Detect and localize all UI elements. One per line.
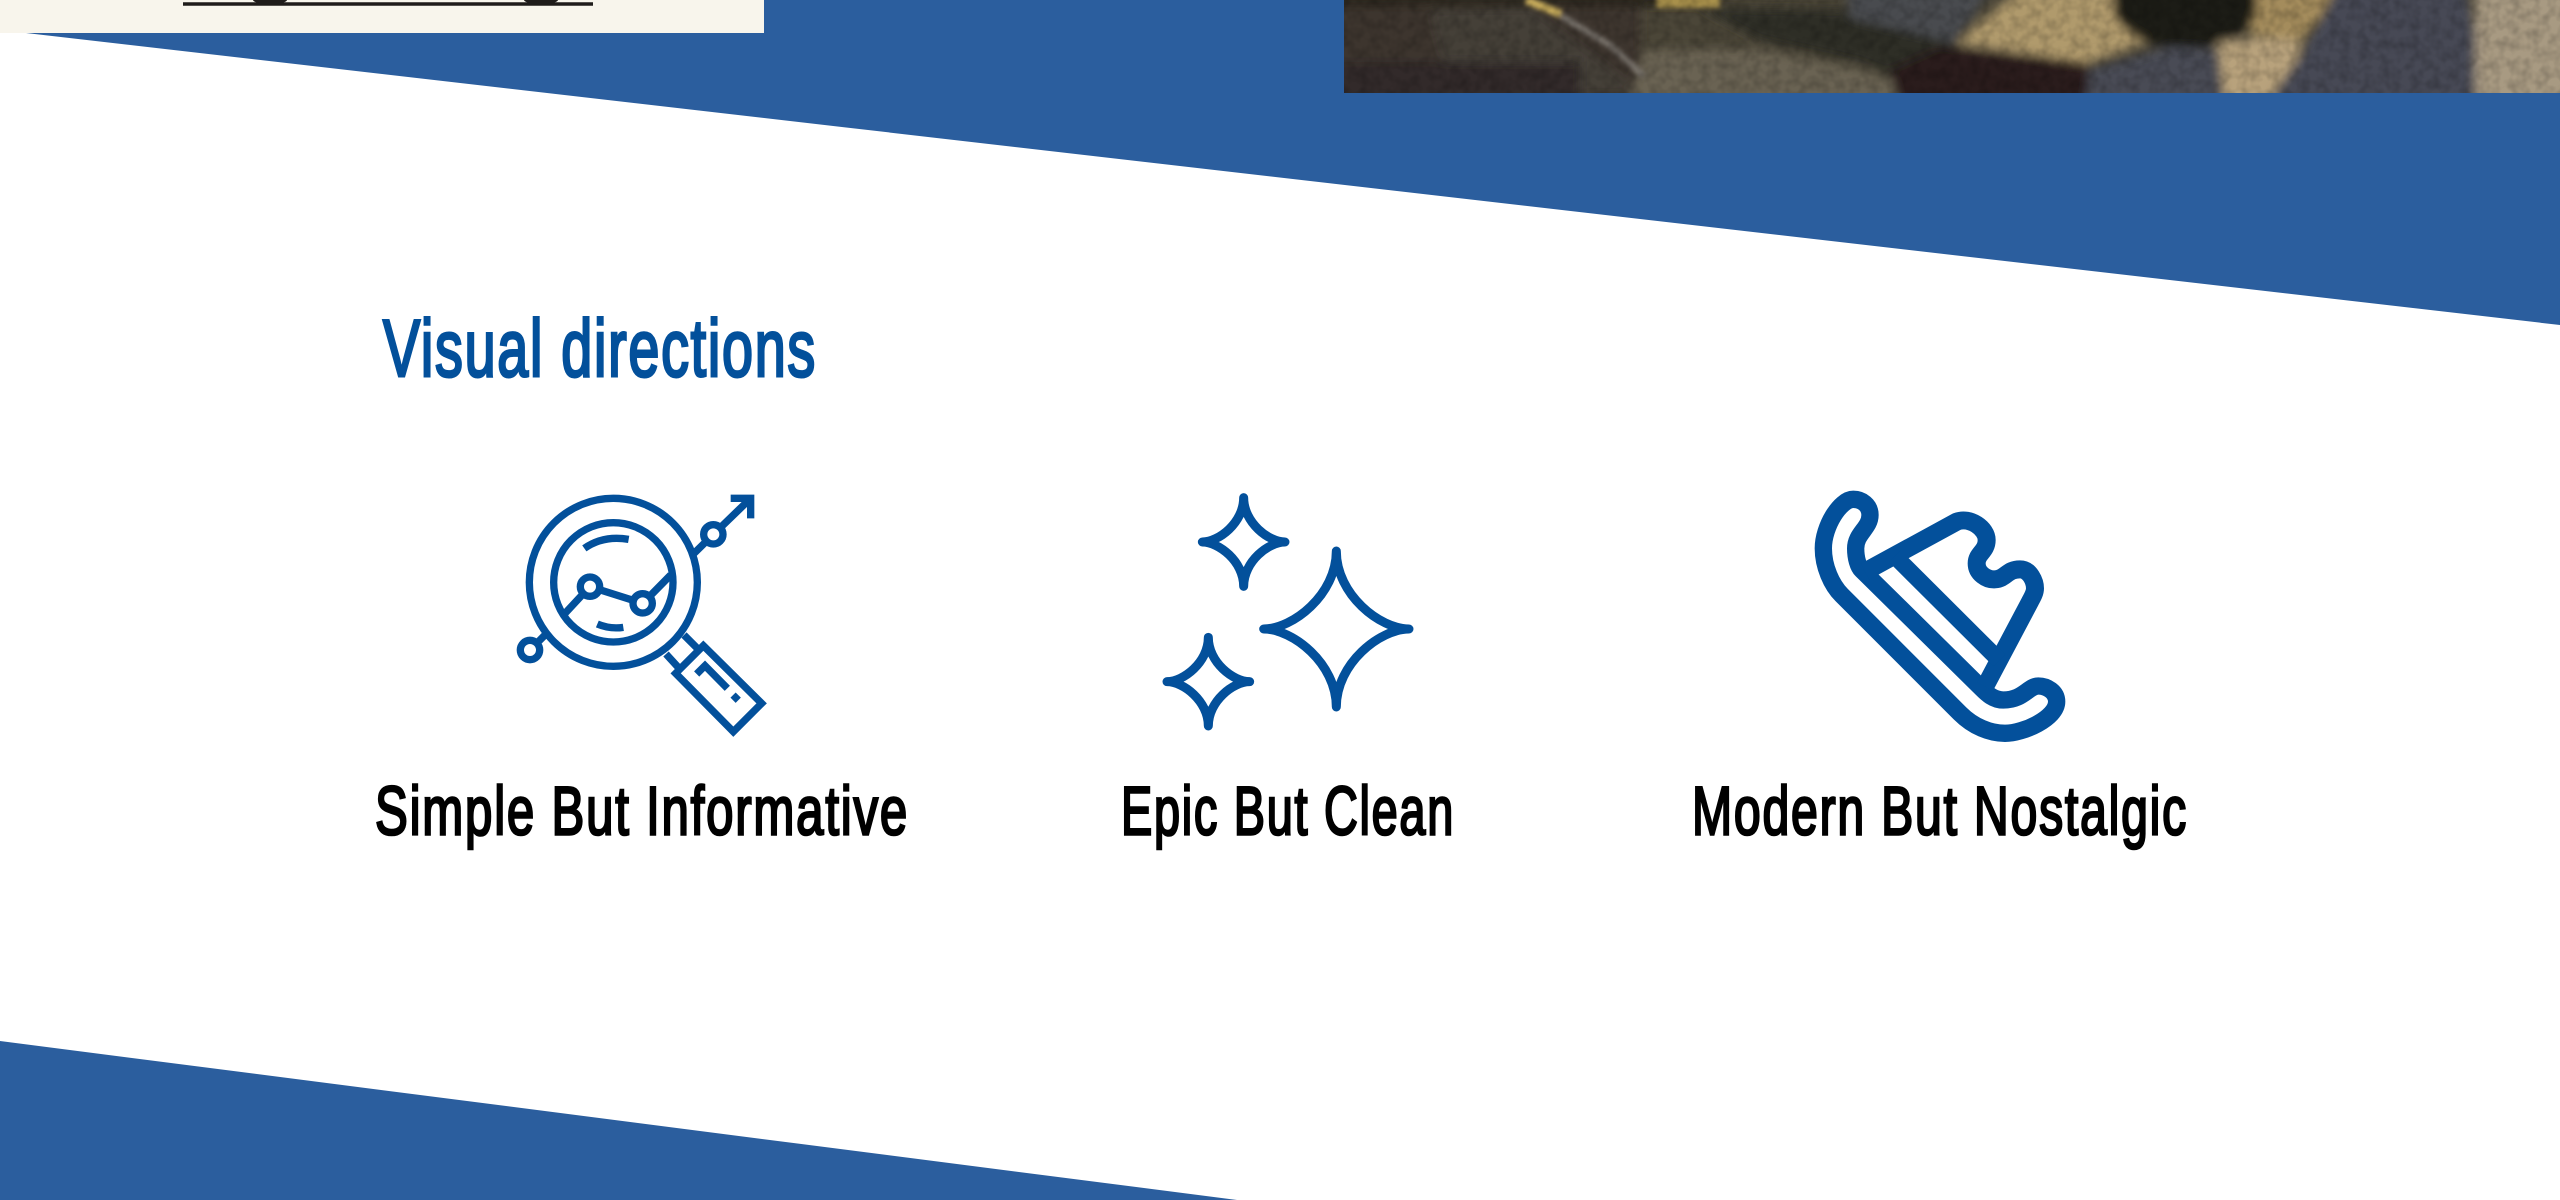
cropped sketch image, top left bbox=[0, 0, 764, 33]
label: Modern But Nostalgic: Modern But Nostalgic bbox=[1692, 772, 2188, 850]
icon: three sparkles bbox=[1167, 498, 1409, 726]
label: Simple But Informative: Simple But Informative bbox=[375, 772, 909, 850]
heading: Visual directions: Visual directions bbox=[383, 304, 817, 394]
top blue diagonal band bbox=[0, 0, 2560, 325]
icon: ice skate bbox=[1823, 499, 2057, 733]
cropped photo of rocks, top right bbox=[1344, 0, 2560, 93]
label: Epic But Clean: Epic But Clean bbox=[1121, 772, 1455, 850]
bottom blue diagonal band bbox=[0, 1041, 1237, 1200]
icon: magnifying glass over chart bbox=[520, 498, 762, 732]
